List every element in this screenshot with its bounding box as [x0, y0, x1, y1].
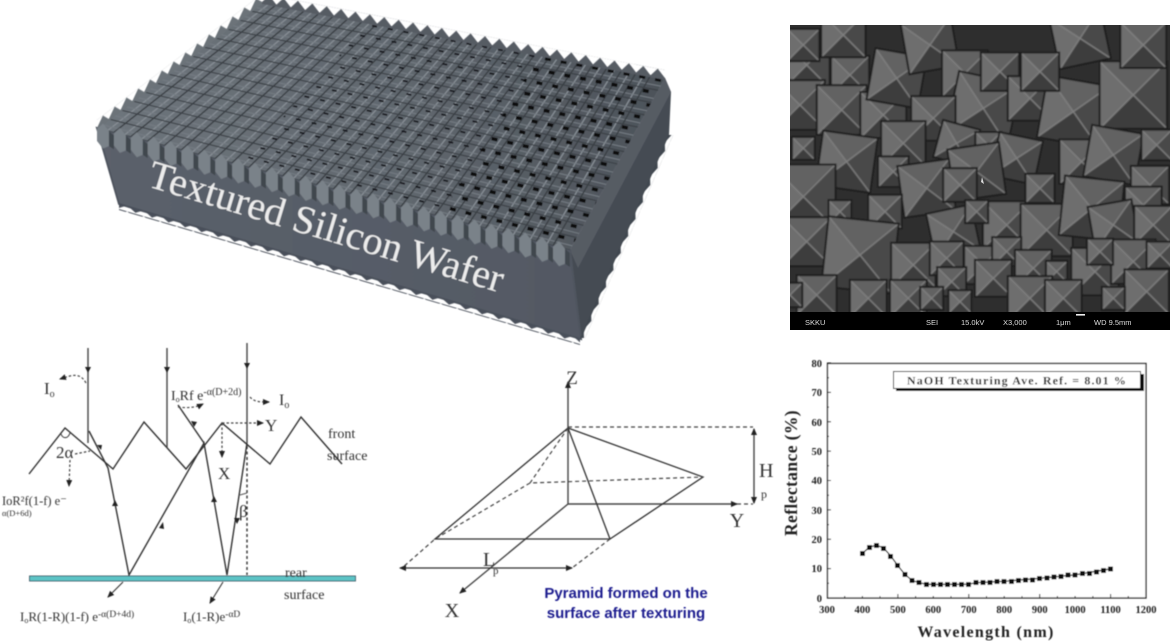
ray labels	[2, 379, 367, 625]
x axis tick labels: 1200	[1136, 605, 1156, 616]
x axis tick labels: 500	[890, 605, 906, 616]
internal reflected rays	[89, 405, 247, 575]
axis and dimension labels	[445, 368, 773, 622]
axis and dimension labels: Y	[730, 510, 744, 532]
y axis tick labels: 60	[812, 418, 822, 429]
ray labels: IoR²f(1-f) e⁻	[2, 494, 67, 508]
SEM micrograph	[771, 7, 1170, 330]
ray labels: I	[279, 392, 284, 409]
micrograph info bar: SEI	[926, 318, 938, 327]
x axis tick labels: 600	[925, 605, 941, 616]
ray labels: I	[183, 609, 187, 624]
diagram: light trapping ray paths	[2, 343, 367, 625]
diagram: pyramid geometry	[400, 368, 773, 622]
ray labels: o	[50, 389, 55, 400]
ray labels: -α(D+2d)	[203, 387, 241, 398]
right bottom saw-tooth edge	[580, 135, 673, 338]
wafer label: Textured Silicon Wafer	[143, 152, 510, 301]
ray labels: α(D+6d)	[2, 508, 32, 518]
ray labels: X	[218, 464, 230, 483]
ray labels: o	[187, 616, 191, 625]
caption	[544, 585, 708, 622]
ray labels: -α(D+4d)	[98, 609, 134, 620]
reflectance line	[862, 545, 1111, 584]
x axis tick labels: 300	[819, 605, 835, 616]
ray labels: o	[24, 616, 28, 625]
front row of pyramid teeth	[97, 120, 570, 272]
x axis tick labels: 1000	[1065, 605, 1086, 616]
y axis tick labels: 10	[812, 564, 822, 575]
ray labels: rear	[285, 566, 307, 581]
caption: surface after texturing	[547, 605, 705, 622]
y axis tick labels: 0	[817, 594, 822, 605]
ray labels: I	[44, 379, 50, 398]
x axis tick labels: 1100	[1100, 605, 1121, 616]
pyramid hidden edges	[402, 427, 753, 568]
right side face of wafer	[570, 78, 671, 339]
micrograph info bar: 15.0kV	[961, 318, 984, 327]
ray labels: β	[239, 502, 248, 521]
apex angle arc	[61, 433, 70, 438]
ray labels: Rf e	[180, 389, 203, 404]
ray labels: surface	[284, 588, 324, 603]
caption: Pyramid formed on the	[544, 585, 708, 602]
coordinate axes	[460, 382, 737, 593]
ray labels: (1-R)e	[191, 609, 226, 624]
top textured surface	[97, 0, 668, 253]
left edge pyramid tips	[97, 0, 262, 130]
ray labels: Y	[265, 416, 277, 435]
axis and dimension labels: p	[493, 565, 499, 577]
back edge pyramid tips	[262, 0, 665, 80]
micrograph info bar: X3,000	[1003, 318, 1027, 327]
ray labels: -αD	[225, 610, 240, 620]
axis and dimension labels: L	[483, 549, 495, 571]
reflectance data markers	[860, 543, 1113, 587]
micrograph info bar: SKKU	[805, 318, 825, 327]
y axis tick labels: 80	[812, 359, 822, 370]
angle beta marker	[240, 493, 247, 495]
legend box	[894, 372, 1144, 391]
illustration: textured silicon wafer	[97, 0, 673, 345]
axis and dimension labels: Z	[566, 368, 578, 389]
micrograph surface with pyramids	[790, 25, 1170, 312]
x axis tick labels: 800	[996, 605, 1012, 616]
y axis tick labels: 50	[812, 447, 822, 458]
incident rays	[85, 343, 250, 448]
ray labels: surface	[327, 449, 367, 464]
exit arrows through rear	[108, 582, 223, 603]
axis and dimension labels: X	[445, 600, 460, 622]
x axis tick labels: 700	[961, 605, 977, 616]
ray labels: front	[328, 427, 355, 442]
base length arrow	[400, 567, 572, 569]
ray labels: o	[284, 400, 289, 411]
plot frame	[828, 364, 1146, 598]
x axis tick labels: 900	[1032, 605, 1048, 616]
y axis tick labels: 20	[812, 535, 822, 546]
dashed normal line	[246, 446, 248, 575]
ray labels: o	[176, 395, 180, 404]
x axis title: Wavelength (nm)	[917, 624, 1055, 641]
right edge teeth	[570, 78, 671, 268]
chart: reflectance vs wavelength	[781, 359, 1156, 641]
height arrow	[753, 429, 755, 503]
axis and dimension labels: p	[761, 487, 767, 501]
y axis tick labels: 40	[812, 476, 822, 487]
micrograph info bar	[790, 312, 1170, 330]
y axis tick labels: 70	[812, 388, 822, 399]
front bottom saw-tooth edge	[119, 203, 580, 345]
ray labels: 2α	[56, 443, 74, 462]
micrograph info bar: 1μm	[1056, 318, 1071, 327]
x axis tick labels: 400	[855, 605, 870, 616]
x axis tick labels	[819, 605, 1156, 616]
pyramid solid edges	[435, 428, 703, 539]
rear surface plate	[30, 576, 356, 581]
y axis tick labels	[812, 359, 822, 605]
front surface zigzag	[29, 417, 342, 474]
ray labels: I	[20, 609, 24, 624]
legend box: NaOH Texturing Ave. Ref. = 8.01 %	[907, 374, 1127, 388]
dotted annotation arrows	[60, 375, 269, 486]
y axis tick labels: 30	[812, 506, 822, 517]
front side face of wafer	[97, 128, 581, 339]
axis ticks	[827, 363, 1128, 598]
ray labels: I	[171, 389, 176, 404]
micrograph info bar: WD 9.5mm	[1094, 318, 1132, 327]
ray labels: R(1-R)(1-f) e	[28, 609, 98, 624]
y axis title: Reflectance (%)	[781, 410, 801, 536]
axis and dimension labels: H	[759, 460, 773, 482]
